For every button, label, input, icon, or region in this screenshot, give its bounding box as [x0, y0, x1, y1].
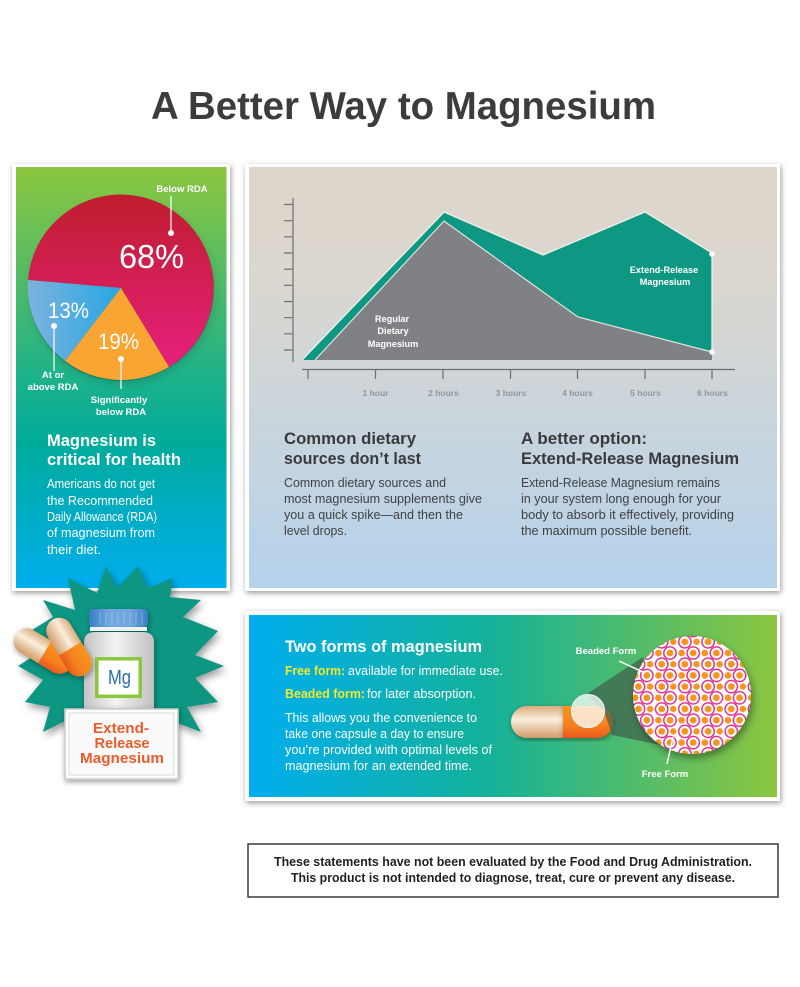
area chart: 4 hours [562, 388, 593, 398]
two forms text [285, 663, 503, 773]
two forms text: This allows you the convenience to [285, 710, 477, 725]
disclaimer box: This product is not intended to diagnose, treat, cure or prevent any disease. [291, 871, 735, 885]
title: A Better Way to Magnesium [151, 85, 656, 128]
heading: a better option [521, 429, 739, 468]
pie chart: 13% [48, 298, 89, 323]
body: a better option: the maximum possible benefit. [521, 523, 692, 538]
product label box: Release [94, 736, 150, 752]
product label box [65, 709, 178, 779]
body: common dietary sources: Common dietary sources and [284, 475, 446, 490]
body: common dietary sources: most magnesium supplements give [284, 491, 482, 506]
bottle [84, 609, 154, 710]
two forms text: Free form: [285, 663, 345, 678]
heading: common dietary sources: sources don’t last [284, 449, 421, 468]
area chart: Dietary [377, 326, 409, 336]
pie chart: At or [42, 370, 64, 381]
capsules [9, 613, 97, 681]
disclaimer box [248, 844, 778, 897]
pie chart: above RDA [28, 382, 78, 393]
capsule with magnifier: Free Form [642, 769, 688, 780]
capsule with magnifier [511, 636, 751, 780]
heading: a better option: Extend-Release Magnesium [521, 449, 739, 468]
pie chart [28, 184, 214, 418]
body: common dietary sources [284, 475, 482, 538]
area chart: 2 hours [428, 388, 459, 398]
panel: magnesium is critical for health [12, 164, 230, 591]
two forms heading: Two forms of magnesium [285, 637, 482, 656]
panel: chart and comparison [245, 164, 780, 591]
body: a better option: in your system long enough for your [521, 491, 722, 506]
two forms text: available for immediate use. [348, 663, 503, 678]
two forms text: Beaded form: [285, 686, 365, 701]
area chart [284, 198, 735, 398]
left body text: their diet. [47, 543, 101, 557]
two forms text: for later absorption. [367, 686, 476, 701]
heading: common dietary sources: Common dietary [284, 429, 417, 448]
left body text: Daily Allowance (RDA) [47, 510, 157, 524]
body: a better option: Extend-Release Magnesium remains [521, 475, 720, 490]
product badge [9, 566, 224, 779]
area chart: Magnesium [640, 277, 690, 287]
body: a better option: body to absorb it effectively, providing [521, 507, 734, 522]
body: a better option [521, 475, 734, 538]
pie chart: below RDA [96, 407, 146, 418]
area chart: Regular [375, 314, 410, 324]
product label box: Magnesium [80, 751, 164, 767]
pie chart: Significantly [91, 395, 148, 406]
area chart: Magnesium [368, 339, 418, 349]
capsule with magnifier: Beaded Form [576, 646, 636, 657]
left body text [47, 477, 157, 557]
body: common dietary sources: you a quick spike—and then the [284, 507, 463, 522]
two forms text: you’re provided with optimal levels of [285, 742, 492, 757]
two forms text: magnesium for an extended time. [285, 758, 472, 773]
panel: two forms of magnesium [245, 611, 780, 801]
product label box: Extend- [93, 721, 149, 737]
area chart: 6 hours [697, 388, 728, 398]
body: common dietary sources: level drops. [284, 523, 347, 538]
heading: common dietary sources [284, 429, 421, 468]
starburst [18, 566, 224, 732]
area chart: Extend-Release [630, 265, 698, 275]
disclaimer box: These statements have not been evaluated by the Food and Drug Administration. [274, 855, 752, 869]
left heading: critical for health [47, 451, 181, 469]
area chart: 3 hours [496, 388, 527, 398]
heading: a better option: A better option: [521, 429, 647, 448]
left heading [47, 432, 181, 469]
pie chart: 19% [98, 329, 139, 354]
pie chart: 68% [119, 238, 184, 275]
left body text: the Recommended [47, 494, 153, 508]
area chart: 5 hours [630, 388, 661, 398]
left body text: Americans do not get [47, 477, 155, 491]
pie chart: Below RDA [156, 184, 208, 195]
left heading: Magnesium is [47, 432, 156, 450]
left body text: of magnesium from [47, 526, 155, 540]
bottle: Mg [108, 667, 131, 689]
area chart: 1 hour [363, 388, 389, 398]
two forms text: take one capsule a day to ensure [285, 726, 464, 741]
